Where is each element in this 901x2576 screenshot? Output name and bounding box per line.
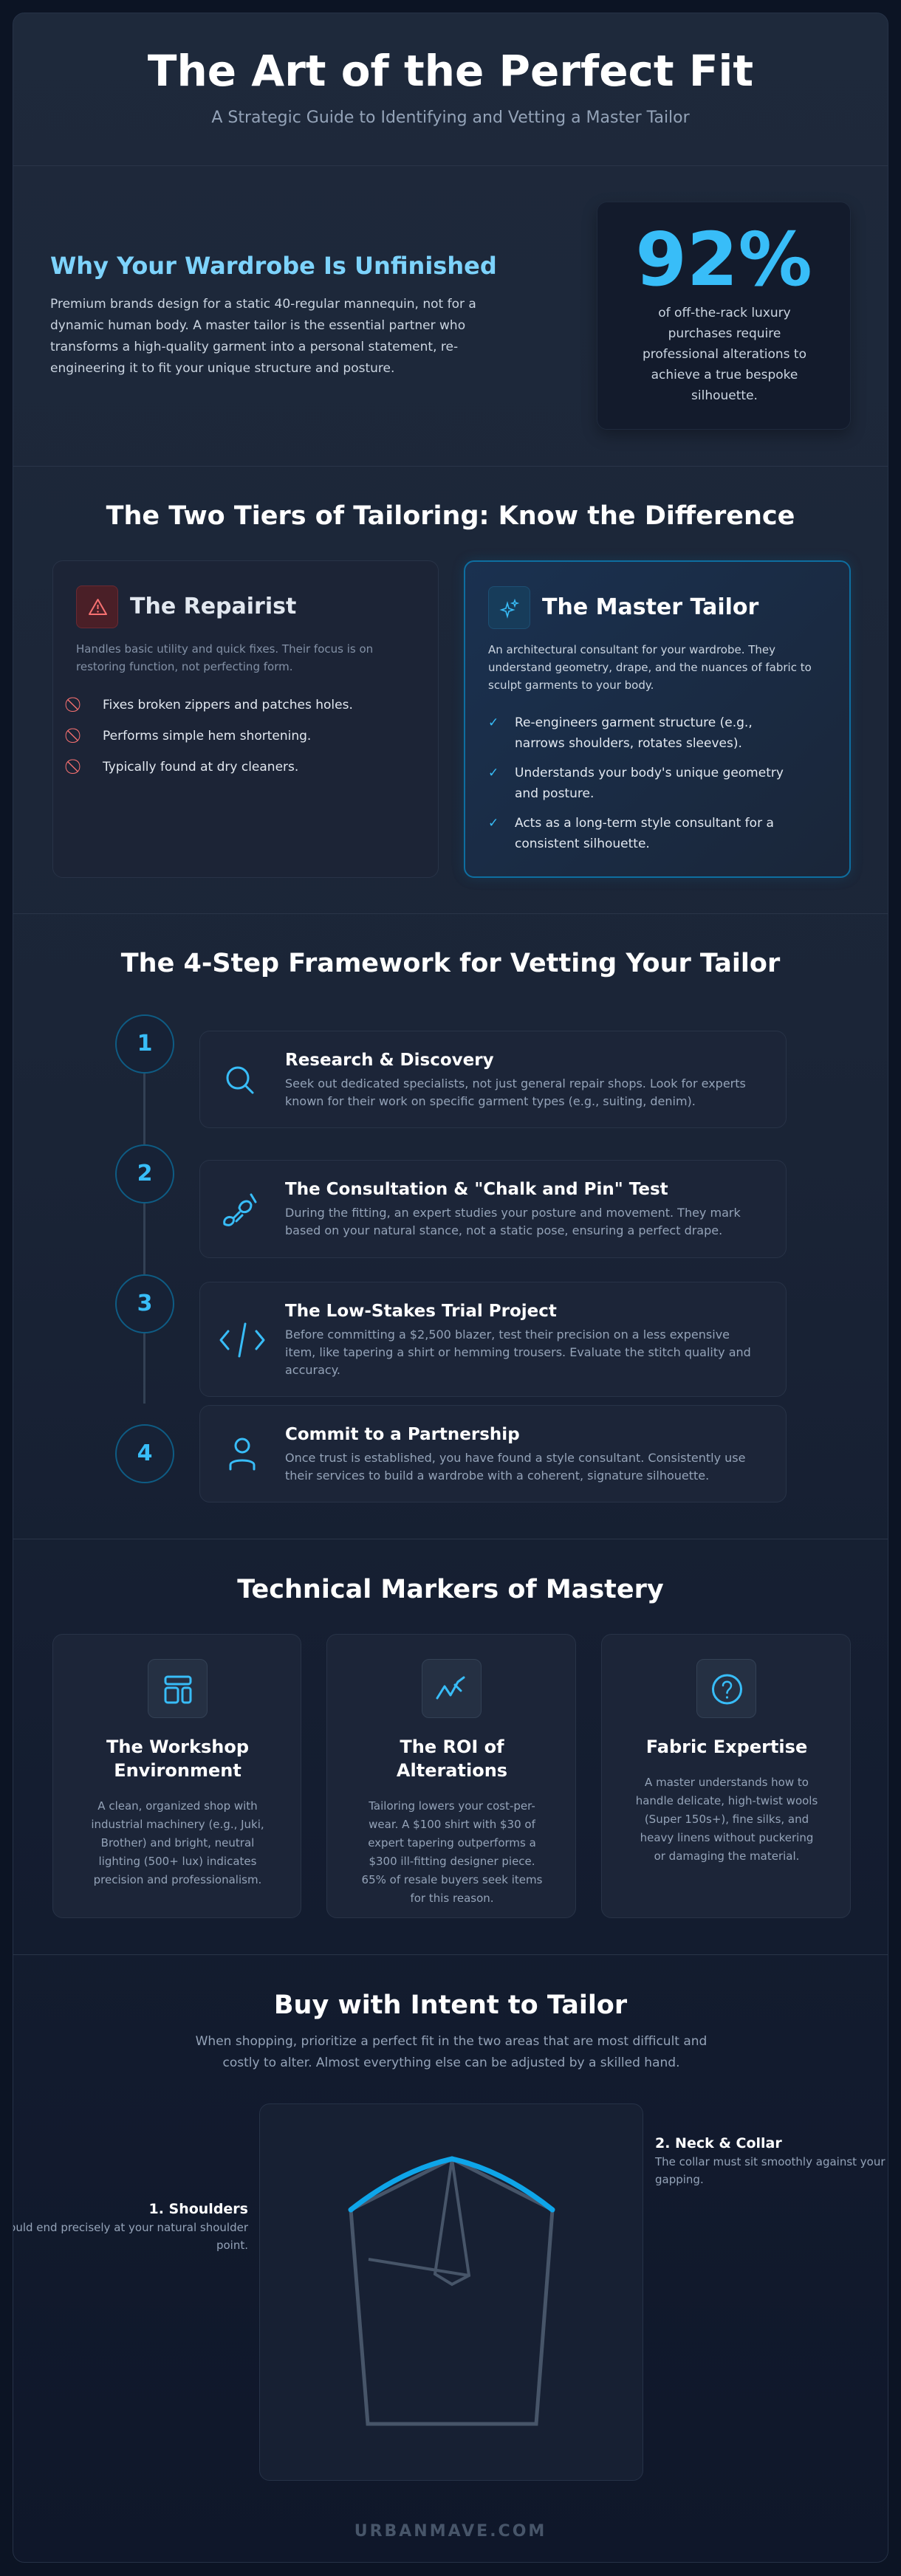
icon: search — [226, 1066, 254, 1094]
buy heading: Buy with Intent to Tailor — [274, 1991, 627, 2020]
ROI title: The ROI of — [400, 1737, 504, 1757]
buy description: When shopping, prioritize a perfect fit in the two areas that are most difficult and — [196, 2034, 707, 2049]
step 2 title: The Consultation & "Chalk and Pin" Test — [285, 1180, 668, 1199]
step 4 card — [199, 1405, 787, 1502]
master tailor description: An architectural consultant for your wardrobe. They understand geometry, drape, and the nuances of fabric to sculpt garments to your body. — [488, 643, 812, 692]
step 4 circle: 4 — [137, 1440, 152, 1466]
master tailor list: ✓ — [488, 766, 499, 780]
icon: trend — [422, 1659, 482, 1718]
label: shoulders — [13, 2201, 248, 2252]
repairist list — [65, 697, 353, 774]
label: shoulders: point. — [216, 2239, 248, 2252]
workshop title: The Workshop Environment — [106, 1737, 249, 1781]
repairist list: Performs simple hem shortening. — [103, 729, 311, 743]
stat number: 92% — [635, 216, 812, 303]
buy description: costly to alter. Almost everything else can be adjusted by a skilled hand. — [223, 2055, 679, 2070]
step 4 title: Commit to a Partnership — [285, 1425, 520, 1444]
icon: warning — [76, 585, 118, 628]
icon: chalk brush — [223, 1193, 257, 1226]
master tailor list: Acts as a long-term style consultant for a consistent silhouette. — [515, 816, 774, 851]
fabric text: or damaging the material. — [654, 1849, 799, 1863]
step 3 card — [199, 1282, 787, 1397]
step 2 circle — [115, 1144, 174, 1203]
repairist title: The Repairist — [130, 594, 296, 619]
step 4 text: Once trust is established, you have found a style consultant. Consistently use their services to build a wardrobe with a coherent, signature silhouette. — [285, 1451, 745, 1483]
fabric text: A master understands how to — [645, 1776, 809, 1789]
diagram: jacket — [259, 2103, 643, 2481]
repairist list: Fixes broken zippers and patches holes. — [103, 698, 353, 712]
workshop text: A clean, organized shop with industrial machinery (e.g., Juki, Brother) and bright, neutral lighting (500+ lux) indicates precision and professionalism. — [91, 1799, 264, 1886]
step 1 circle: 1 — [137, 1031, 152, 1057]
fabric text: handle delicate, high-twist wools — [636, 1794, 818, 1807]
master tailor list: ✓ — [488, 816, 499, 831]
step 1 card — [199, 1031, 787, 1128]
marker card: workshop — [52, 1634, 301, 1918]
repairist list: Typically found at dry cleaners. — [103, 760, 298, 774]
step 2 text: During the fitting, an expert studies your posture and movement. They mark based on your natural stance, not a static pose, ensuring a perfect drape. — [285, 1206, 741, 1237]
tiers heading: The Two Tiers of Tailoring: Know the Difference — [106, 501, 795, 531]
master tailor list: ✓ — [488, 715, 499, 730]
step 1 circle — [115, 1014, 174, 1074]
icon: sparkles — [488, 586, 530, 629]
fabric text: heavy linens without puckering — [640, 1831, 813, 1844]
icon: layout — [148, 1659, 208, 1718]
master tailor list: Re-engineers garment structure (e.g., narrows shoulders, rotates sleeves). — [515, 715, 753, 751]
step 2 circle: 2 — [137, 1161, 152, 1186]
fabric title: Fabric Expertise — [646, 1737, 807, 1757]
master tailor title: The Master Tailor — [542, 594, 758, 620]
ROI text: Tailoring lowers your cost-per-wear. A $100 shirt with $30 of expert tapering outperforms a $300 ill-fitting designer piece. 65% of resale buyers seek items for this reason. — [362, 1799, 542, 1905]
buy description — [196, 2034, 707, 2070]
label: neck & collar — [654, 2135, 888, 2186]
master tailor list — [488, 715, 784, 851]
icon: code — [220, 1323, 264, 1357]
fabric text — [636, 1776, 818, 1863]
label: shoulders: 1. Shoulders — [148, 2201, 248, 2217]
markers heading: Technical Markers of Mastery — [237, 1575, 664, 1604]
framework heading: The 4-Step Framework for Vetting Your Tailor — [121, 949, 780, 978]
repairist description: Handles basic utility and quick fixes. Their focus is on restoring function, not perfecting form. — [76, 642, 373, 673]
intro heading: Why Your Wardrobe Is Unfinished — [50, 252, 497, 280]
timeline line — [143, 1044, 145, 1404]
step 4 circle — [115, 1424, 174, 1483]
step 2 card — [199, 1160, 787, 1258]
marker card: ROI — [326, 1634, 576, 1918]
intro paragraph: Premium brands design for a static 40-regular mannequin, not for a dynamic human body. A master tailor is the essential partner who transforms a high-quality garment into a personal statement, re-engineering it to fit your unique structure and posture. — [50, 297, 476, 376]
stat caption: of off-the-rack luxury purchases require professional alterations to achieve a true bespoke silhouette. — [643, 306, 806, 403]
header: subtitle: A Strategic Guide to Identifying and Vetting a Master Tailor — [211, 109, 690, 127]
step 1 title: Research & Discovery — [285, 1051, 494, 1070]
icon: user — [229, 1438, 256, 1471]
step 3 circle — [115, 1274, 174, 1333]
footer: URBANMAVE.COM — [354, 2522, 547, 2541]
fabric text: (Super 150s+), fine silks, and — [645, 1813, 809, 1826]
step 3 title: The Low-Stakes Trial Project — [285, 1302, 557, 1321]
stat box: 92% — [597, 202, 851, 430]
header: title: The Art of the Perfect Fit — [148, 46, 753, 96]
panel: master tailor — [464, 560, 851, 878]
step 1 text: Seek out dedicated specialists, not just general repair shops. Look for experts known for their work on specific garment types (e.g., suiting, denim). — [285, 1076, 746, 1108]
marker card: fabric — [601, 1634, 851, 1918]
step 3 circle: 3 — [137, 1291, 152, 1316]
icon: question — [696, 1659, 756, 1718]
step 3 text: Before committing a $2,500 blazer, test their precision on a less expensive item, like tapering a shirt or hemming trousers. Evaluate the stitch quality and accuracy. — [285, 1328, 751, 1377]
ROI title: Alterations — [397, 1760, 507, 1781]
label: neck & collar: 2. Neck & Collar — [655, 2135, 782, 2151]
panel: repairist — [52, 560, 439, 878]
ROI title — [397, 1737, 507, 1781]
master tailor list: Understands your body's unique geometry and posture. — [515, 766, 784, 801]
